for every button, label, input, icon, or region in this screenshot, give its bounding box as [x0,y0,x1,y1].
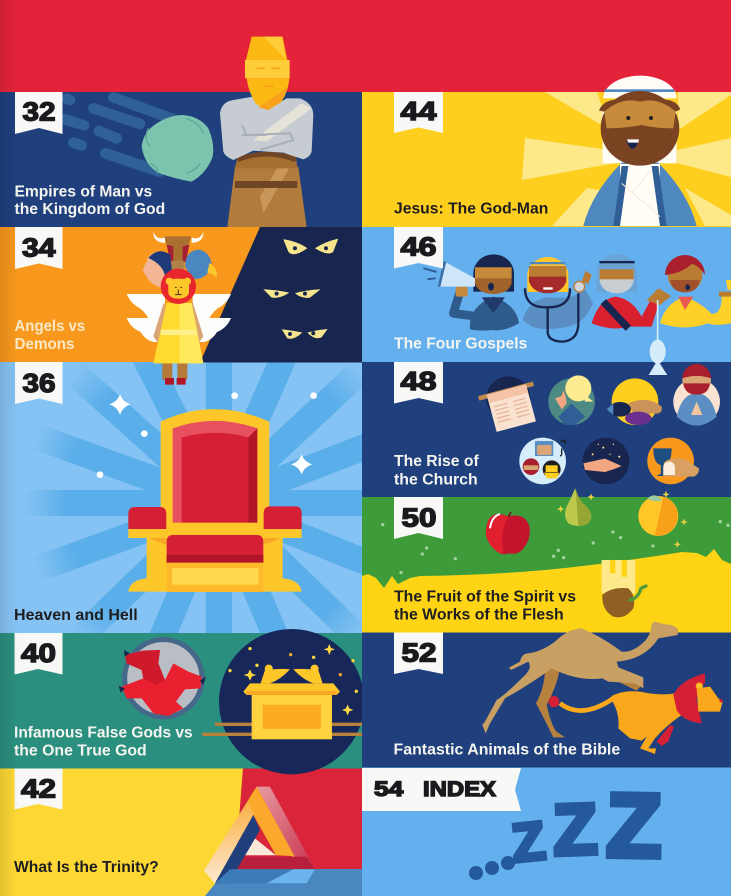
icon: praying man [673,364,720,426]
banner: 54 INDEX: 54 [374,778,404,801]
heading: Empires of Man vs the Kingdom of God: Empires of Man vs [14,184,152,200]
illustration: flying rock [65,97,213,182]
figure: Matthew with megaphone [423,254,519,331]
badge: 42 [14,768,62,810]
heading: The Four Gospels: The Four Gospels [394,336,527,352]
icon: sparkles [97,392,317,478]
icon: fish on a line [649,300,667,375]
heading: The Fruit of the Spirit vs the Works of the Flesh [394,588,576,624]
badge: 32 [15,92,62,134]
icon: camel [482,621,678,737]
heading: Infamous False Gods vs the One True God: Infamous False Gods vs [14,724,193,742]
badge: 34 [15,227,62,269]
icon: lion [549,673,723,754]
stars and seeds [381,491,730,574]
icon: orange [638,495,678,536]
panel: 52 Fantastic Animals [362,621,731,768]
badge: 50: 50 [402,502,436,532]
panel: 46 Four Gospels [362,227,731,375]
icon: three headed dog [119,640,206,717]
banner: 54 INDEX [362,768,521,811]
icon: speech bubble and pointing hand [548,375,595,425]
badge: 46 [394,227,443,268]
panel: 50 Fruit of the Spirit [362,488,731,633]
icon: cup and bread [647,438,699,484]
heading: Angels vs Demons [14,318,85,353]
heading: The Fruit of the Spirit vs the Works of the Flesh: the Works of the Flesh [394,606,564,624]
badge: 32: 32 [22,96,56,126]
icon: sleeping zZZ: Z [552,790,599,871]
top red band [0,0,731,93]
tree canopy [362,497,731,588]
heading: The Rise of the Church [394,453,479,488]
heading: Fantastic Animals of the Bible: Fantastic Animals of the Bible [394,742,620,758]
panel: 42 Trinity [0,768,362,896]
banner: 54 INDEX: INDEX [423,778,496,801]
illustration: statue [220,37,313,227]
badge: 42: 42 [21,774,56,804]
badge: 36: 36 [22,368,56,398]
icon: demon eyes [263,239,338,339]
icon: fish bread grapes [607,378,662,425]
icon: sleeping zZZ: Z [606,776,662,877]
heading: Angels vs Demons: Demons [14,336,75,353]
badge: 44: 44 [400,96,437,126]
icon: apple [486,512,530,554]
heading: Empires of Man vs the Kingdom of God [14,184,165,218]
badge: 48 [394,362,443,404]
heading: Heaven and Hell: Heaven and Hell [14,607,138,624]
icon: impossible triangle [204,787,315,883]
badge: 40: 40 [21,638,56,668]
heading: The Rise of the Church: the Church [394,472,478,488]
panel: 54 Index [362,768,731,896]
badge: 40 [14,633,62,674]
badge: 44 [394,92,443,133]
figure: Luke with stethoscope [523,257,593,342]
figure: Jesus [583,76,697,226]
heading: Empires of Man vs the Kingdom of God: the Kingdom of God [14,201,165,218]
sun rays [522,92,731,226]
panel: 44 Jesus [362,76,731,227]
panel: 36 Heaven and Hell [0,362,362,633]
badge: 50 [394,497,443,539]
figure: Mark with sash [592,254,671,329]
icon: rotten fruit with worm [602,560,646,617]
badge: 36 [15,362,62,404]
icon: throne [128,409,302,592]
heading: The Fruit of the Spirit vs the Works of the Flesh: The Fruit of the Spirit vs [394,588,576,606]
sunburst rays [32,362,362,633]
icon: hand under stars [583,438,629,484]
badge: 52: 52 [402,638,436,668]
badge: 46: 46 [400,232,436,262]
icon: scroll [478,376,543,434]
heading: Jesus: The God-Man: Jesus: The God-Man [394,200,548,218]
heading: Infamous False Gods vs the One True God [14,724,193,760]
badge: 52 [394,632,443,674]
heading: Angels vs Demons: Angels vs [14,318,85,335]
heading: What Is the Trinity?: What Is the Trinity? [14,859,159,876]
panel: 40 False Gods [0,629,365,774]
icon: cherub with four faces [127,232,231,385]
icon: sleeping zZZ [470,776,662,880]
panel: 34 Angels vs Demons [0,227,362,385]
icon: ark of the covenant [202,629,365,774]
icon: sleeping zZZ: Z [509,811,548,874]
panel: 48 Rise of the Church [362,362,731,498]
heading: The Rise of the Church: The Rise of [394,453,479,470]
icon: pear [565,488,591,526]
badge: 48: 48 [400,366,436,396]
figure: John with cup [660,255,731,327]
icon: singers [519,438,566,484]
badge: 34: 34 [22,232,56,262]
heading: Infamous False Gods vs the One True God: the One True God [14,742,147,760]
panel: 32 Empires of Man [0,37,362,227]
